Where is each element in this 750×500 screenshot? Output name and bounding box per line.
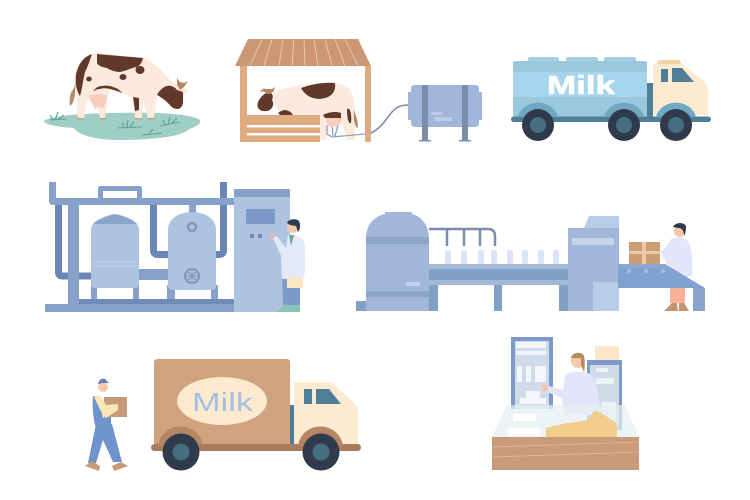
output belt side — [693, 288, 705, 311]
packing machine top — [584, 216, 619, 228]
packer — [660, 223, 692, 311]
panel: pasteurization equipment — [45, 182, 305, 312]
shop counter — [492, 437, 639, 470]
barn posts — [240, 66, 371, 142]
milk hose — [371, 105, 408, 133]
left vessel lid — [93, 214, 137, 224]
truck chassis — [151, 444, 361, 451]
technician folder — [287, 277, 303, 288]
packing machine door — [593, 282, 619, 311]
worker overalls — [93, 396, 111, 430]
cow hooves — [77, 117, 155, 120]
tank plate — [406, 282, 420, 286]
worker shoes — [85, 461, 128, 471]
packing machine vents — [572, 238, 614, 245]
worker head — [98, 382, 108, 392]
grass patch — [44, 113, 200, 140]
technician head — [287, 221, 299, 233]
cardboard box — [629, 242, 660, 264]
dairy packs — [508, 414, 540, 436]
tanker light band — [513, 72, 647, 97]
technician coat — [273, 234, 305, 279]
belt rollers — [627, 269, 665, 273]
cab connector — [647, 83, 653, 117]
panel: milking barn — [235, 39, 482, 142]
barn cow tail — [354, 110, 358, 128]
barn cow ear — [259, 87, 275, 94]
packing machine — [568, 228, 619, 311]
shopkeeper — [542, 353, 600, 415]
shopkeeper hand — [542, 384, 548, 392]
technician tie — [289, 235, 294, 246]
packer coat — [660, 238, 692, 284]
output belt — [618, 264, 705, 288]
cow ear and horn — [177, 78, 188, 90]
tanker body — [513, 61, 647, 117]
panel: delivery worker — [85, 379, 128, 471]
cow body — [75, 53, 189, 118]
wheel arches — [518, 103, 696, 117]
tank lids — [528, 57, 636, 61]
base platform — [45, 304, 235, 312]
shopkeeper hair — [571, 353, 585, 372]
cab roof — [657, 60, 681, 64]
tanker wheels — [522, 109, 692, 141]
cow udder — [89, 94, 107, 109]
technician hand — [270, 232, 274, 238]
grass tufts — [50, 112, 180, 135]
cab windows — [661, 68, 694, 82]
cabinet buttons — [250, 234, 262, 238]
packer legs — [670, 280, 685, 303]
panel: dairy shop — [492, 337, 639, 470]
cow tail — [70, 80, 76, 106]
Milk label: Milk — [547, 70, 616, 100]
cabinet screen — [246, 209, 275, 224]
tanker hubs — [530, 117, 684, 133]
roof planks — [250, 39, 358, 66]
worker legs — [88, 424, 122, 463]
barn cow — [273, 83, 355, 140]
conveyor legs — [429, 285, 568, 311]
base upper strip — [79, 299, 235, 304]
light pipes — [49, 182, 234, 304]
vessel valve wheel — [185, 269, 199, 283]
barn cow spots — [257, 83, 351, 123]
conveyor — [429, 264, 569, 285]
right fridge — [587, 360, 622, 430]
shopkeeper body — [547, 372, 600, 415]
cheese — [546, 410, 617, 437]
big filling tank — [366, 212, 429, 311]
cabinet top band — [234, 189, 290, 197]
technician — [270, 219, 305, 312]
truck hubs — [172, 444, 330, 460]
milk oval — [177, 377, 267, 425]
truck box — [154, 359, 290, 446]
panel: grazing cow — [44, 53, 200, 140]
milk storage tank — [408, 85, 482, 142]
cow spots — [76, 54, 183, 111]
base block — [356, 301, 367, 311]
glass display case — [492, 405, 639, 437]
tanker cab — [653, 64, 708, 115]
Milk label: Milk — [192, 387, 254, 417]
tank bands — [366, 237, 429, 297]
vessel gauge — [188, 223, 196, 231]
panel: delivery truck — [151, 359, 361, 470]
truck cab windows — [304, 389, 341, 404]
filling pipes — [429, 229, 495, 246]
packer head — [674, 225, 686, 237]
packer hair — [673, 223, 686, 236]
tank legs — [91, 285, 218, 299]
worker cap — [98, 379, 109, 384]
technician shoes — [276, 305, 300, 312]
fence gaps — [247, 125, 320, 136]
control cabinet — [234, 189, 290, 312]
technician trousers — [282, 276, 300, 305]
counter planks — [492, 442, 639, 457]
left vessel — [91, 214, 139, 288]
technician hair — [287, 219, 300, 232]
worker shirt — [94, 395, 118, 418]
truck wheels — [162, 434, 340, 470]
dark pipes — [58, 182, 224, 276]
panel: bottling line — [356, 212, 705, 311]
bottles — [445, 250, 559, 265]
barn cow udder — [326, 118, 342, 127]
boxes on fridge — [595, 346, 619, 360]
chassis — [511, 116, 711, 122]
shopkeeper head — [571, 354, 585, 368]
barn roof — [235, 39, 371, 66]
conveyor belt — [429, 269, 569, 280]
worker parcel — [104, 397, 127, 417]
milking machine — [327, 125, 365, 137]
belt top edge — [618, 264, 671, 268]
panel: milk tanker truck — [511, 57, 711, 141]
truck cab — [294, 382, 358, 445]
truck arches — [158, 426, 343, 446]
right vessel — [168, 212, 216, 290]
left fridge — [511, 337, 553, 409]
packer shoes — [664, 303, 689, 311]
truck connector — [290, 405, 295, 445]
vessel seam lines — [91, 262, 216, 266]
barn fence — [240, 115, 320, 142]
